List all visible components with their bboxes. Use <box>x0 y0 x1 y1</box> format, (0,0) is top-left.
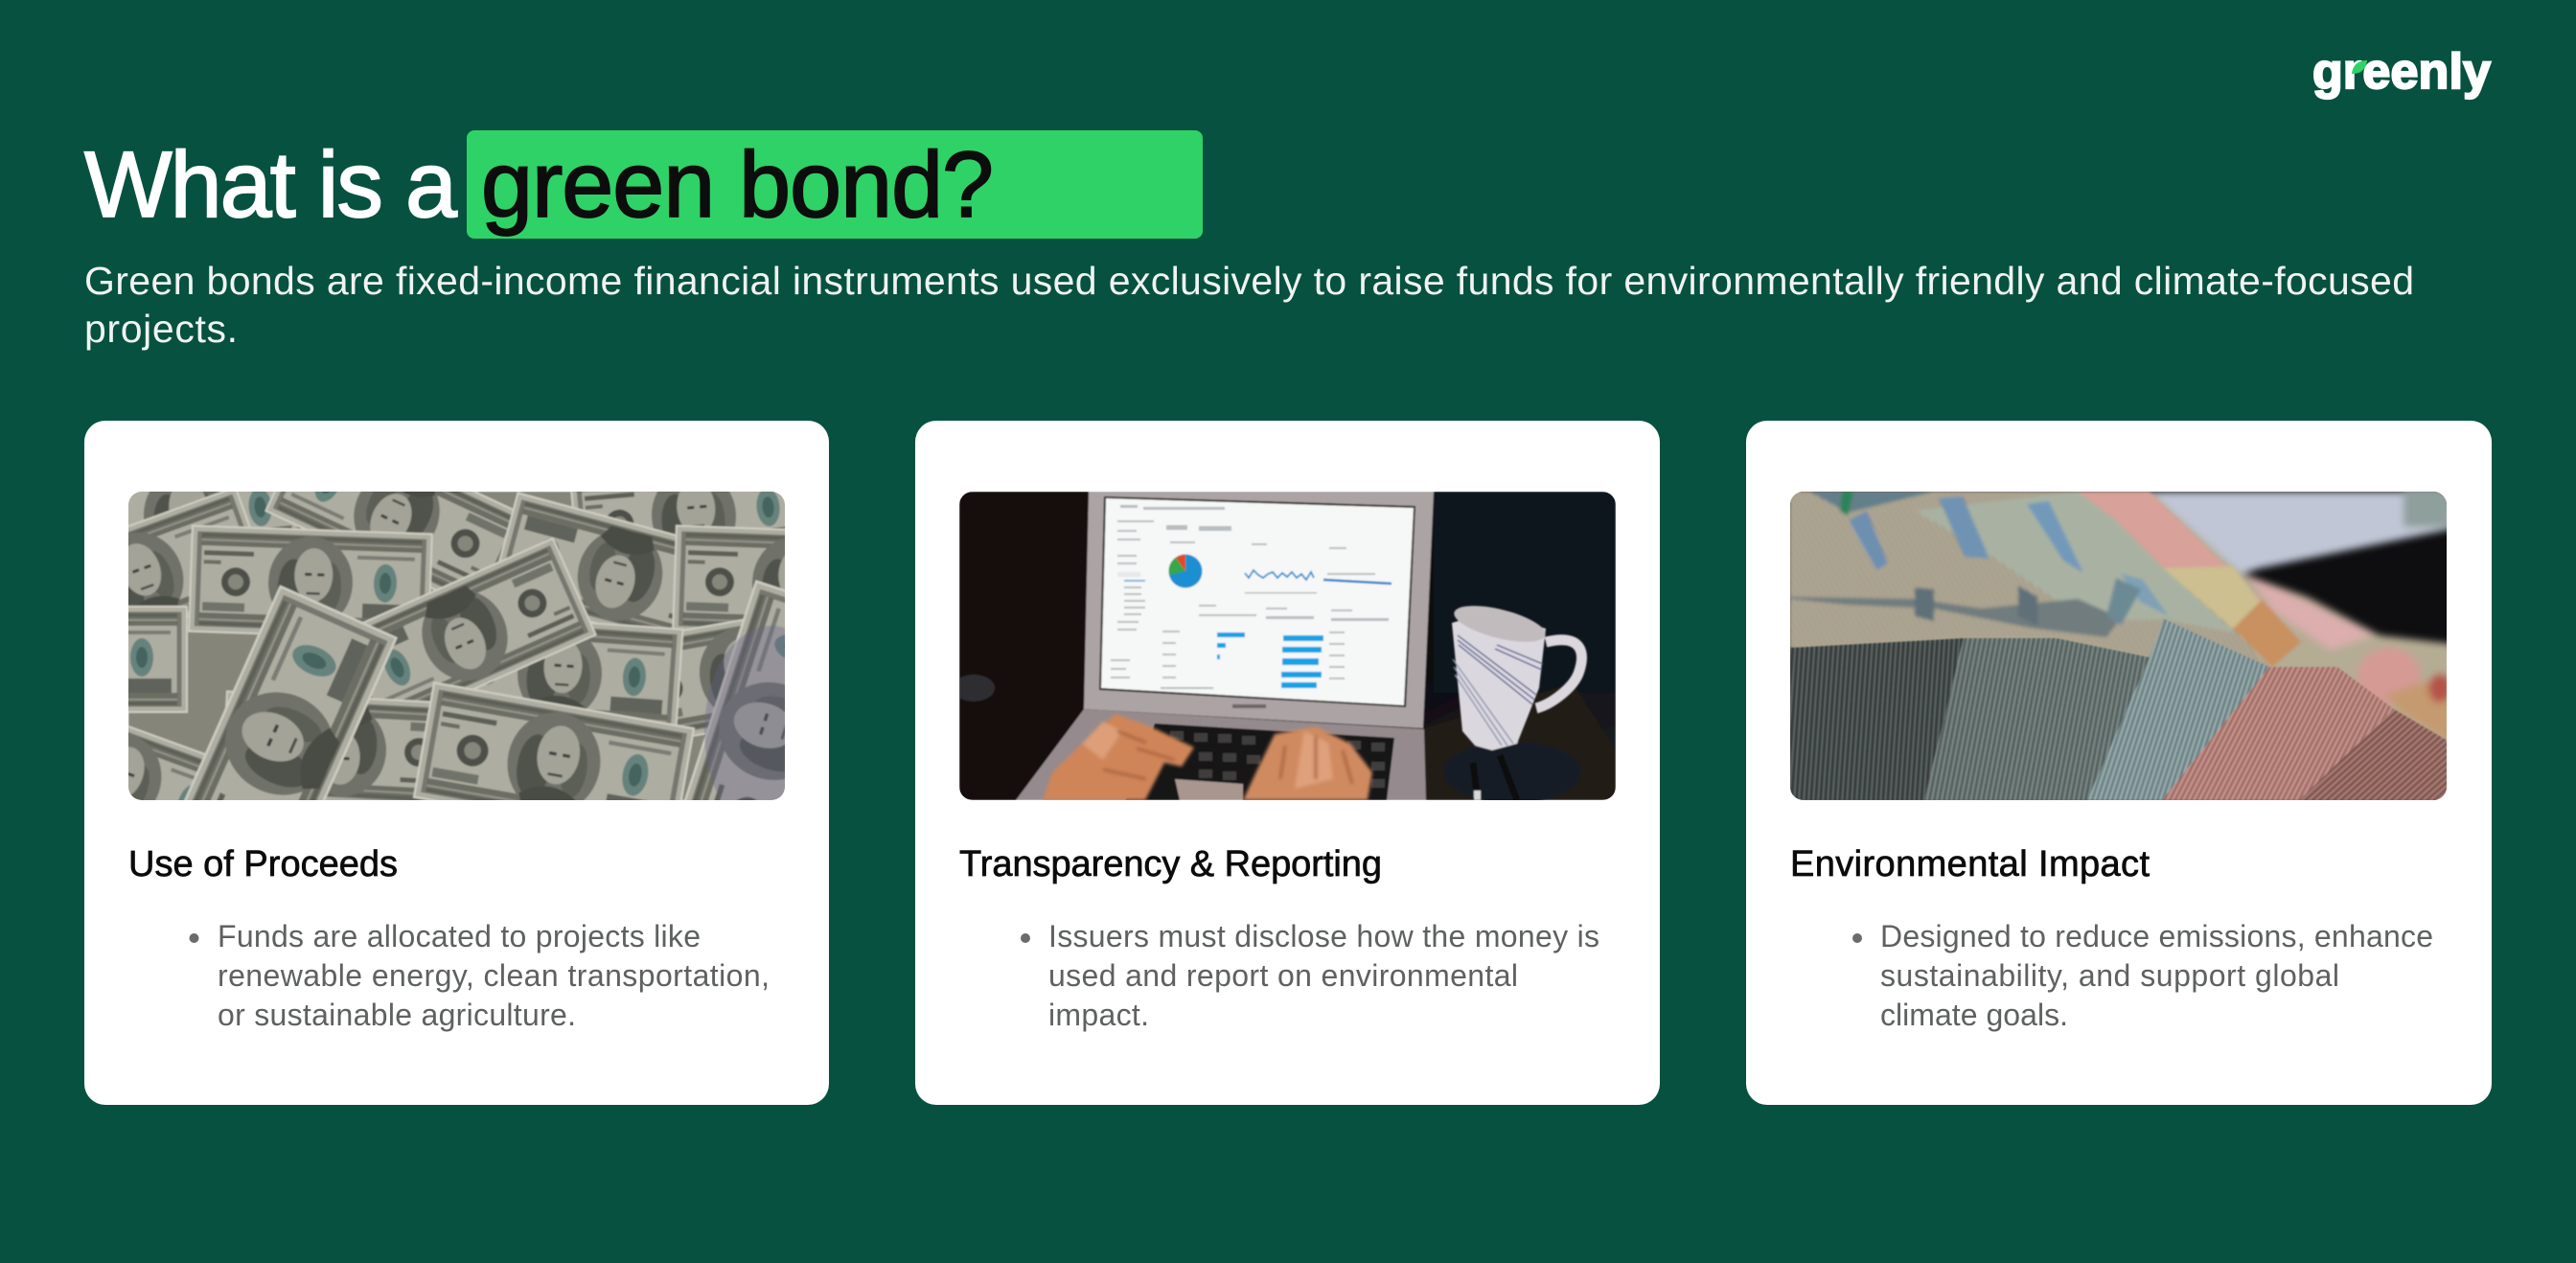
card bullet text <box>1852 919 2433 1032</box>
logo: greenly: greenly <box>2312 44 2491 100</box>
card bullet text: renewable energy, clean transportation, <box>218 958 770 993</box>
panel: environmental impact <box>1746 421 2492 1105</box>
mug <box>1443 742 1581 803</box>
panel: transparency and reporting <box>915 421 1660 1105</box>
title highlight: green bond? <box>481 132 994 237</box>
card bullet text <box>1021 919 1599 1032</box>
coloured bill tops <box>2078 492 2262 602</box>
blurred backdrop <box>1790 487 2461 800</box>
card heading: Environmental Impact <box>1790 844 2150 884</box>
dashboard <box>1169 554 1202 588</box>
card heading: Use of Proceeds <box>128 844 398 884</box>
panel: use of proceeds <box>84 421 829 1105</box>
subtitle <box>84 259 2414 351</box>
photo: stacks of banknotes <box>1790 487 2461 800</box>
title <box>84 130 1203 239</box>
pens <box>1473 763 1478 800</box>
laptop <box>1084 492 1434 728</box>
card bullet text: or sustainable agriculture. <box>218 998 576 1032</box>
photo: laptop with analytics and mug <box>953 492 1616 803</box>
card bullet text: used and report on environmental <box>1048 958 1518 993</box>
hands <box>1043 714 1372 800</box>
card bullet text: sustainability, and support global <box>1880 958 2339 993</box>
card bullet text: Designed to reduce emissions, enhance <box>1880 919 2433 953</box>
subtitle: Green bonds are fixed-income financial instruments used exclusively to raise funds for environmentally friendly and climate-focused <box>84 259 2414 303</box>
card bullet text: Funds are allocated to projects like <box>218 919 701 953</box>
card bullet text: climate goals. <box>1880 998 2068 1032</box>
photo: pile of dollar bills <box>128 492 785 800</box>
title highlight <box>467 130 1203 239</box>
keyboard keys <box>1170 731 1385 788</box>
icon: leaf on the r <box>2352 60 2367 74</box>
card bullet text: impact. <box>1048 998 1149 1032</box>
card bullet text: Issuers must disclose how the money is <box>1048 919 1599 953</box>
card bullet text <box>190 919 770 1032</box>
fanned front faces <box>1790 638 1964 800</box>
subtitle: projects. <box>84 307 238 351</box>
title: What is a <box>84 132 457 237</box>
card heading: Transparency & Reporting <box>959 844 1382 884</box>
